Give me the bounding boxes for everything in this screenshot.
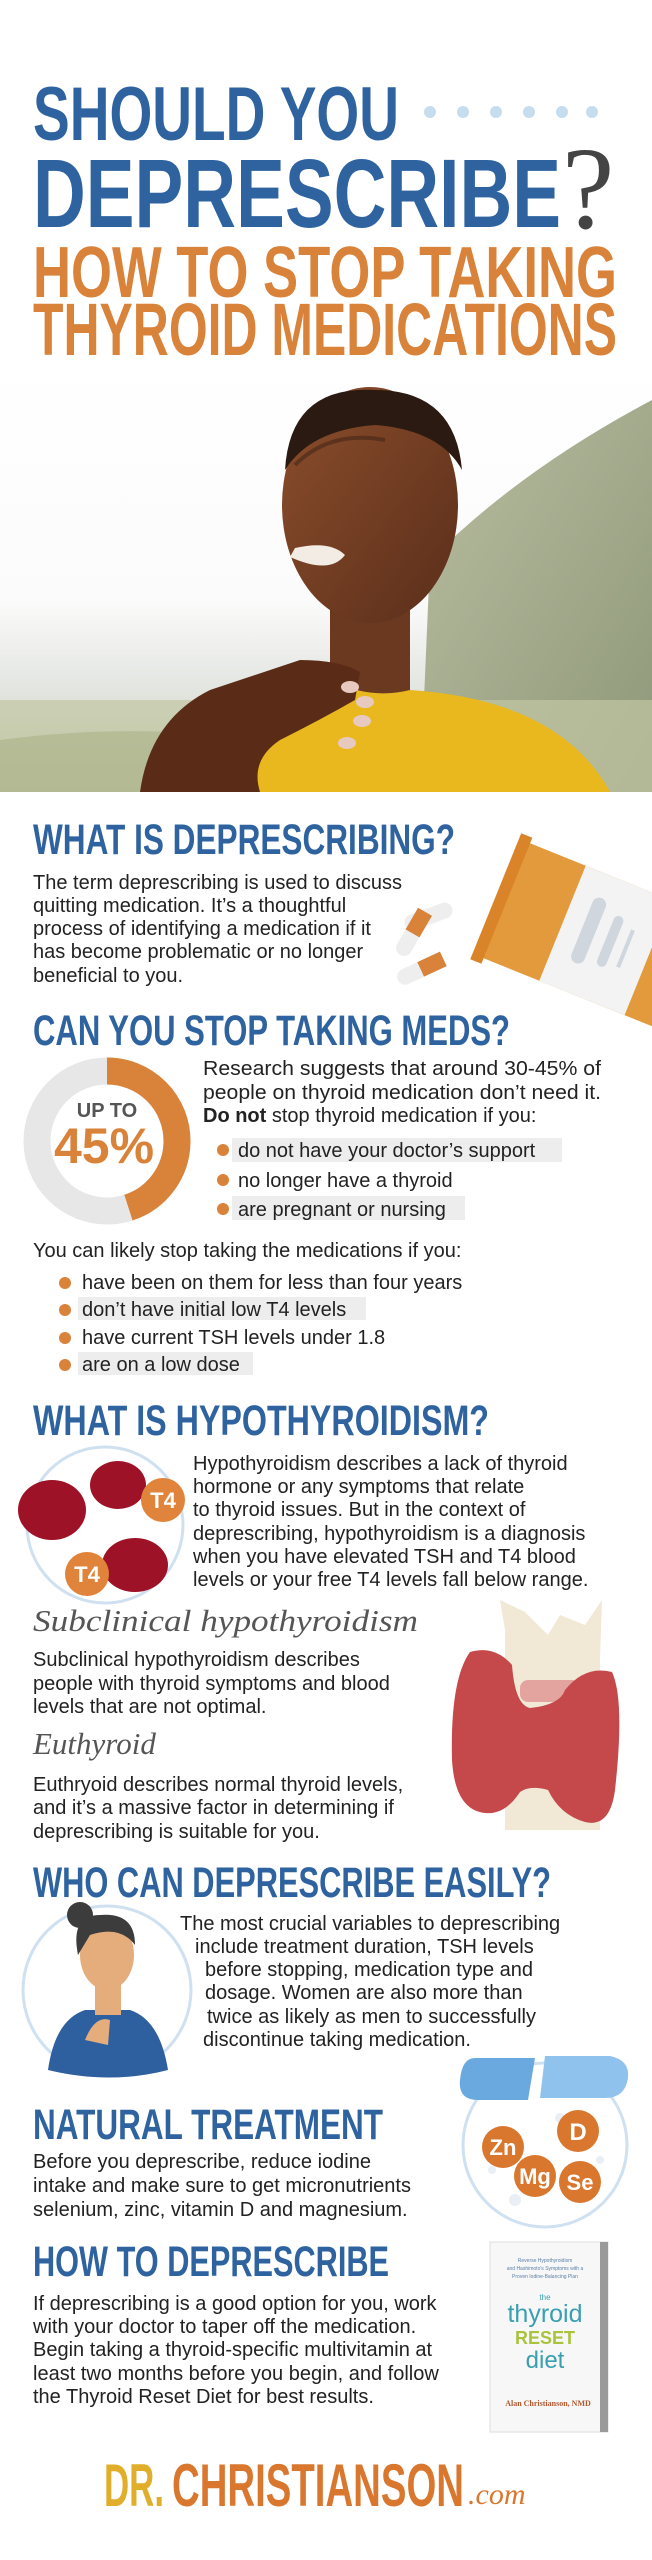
text: euthyroid: Euthryoid describes normal thyroid levels, (33, 1774, 403, 1796)
footer logo: DR. CHRISTIANSON.com: DR. (104, 2452, 164, 2519)
text: how to deprescribe: least two months before you begin, and follow (33, 2363, 439, 2385)
text: how to deprescribe (32, 2293, 439, 2408)
icon: woman (23, 1902, 191, 2078)
text: research (203, 1058, 601, 1127)
list: do not stop if: do not have your doctor’s support (238, 1140, 536, 1162)
icon: capsule and nutrients: Se (567, 2170, 593, 2195)
text: how to deprescribe: If deprescribing is a good option for you, work (33, 2293, 438, 2315)
title: SHOULD YOU (33, 72, 399, 157)
icon: blood cells with T4: T4 (74, 1562, 101, 1587)
icon: thyroid reset diet book: diet (526, 2347, 565, 2374)
icon: thyroid gland (452, 1600, 619, 1830)
text: hypothyroidism definition: to thyroid issues. But in the context of (193, 1499, 526, 1521)
list: you can likely stop if: have current TSH levels under 1.8 (82, 1327, 385, 1349)
icon: thyroid reset diet book: Proven Iodine-Balancing Plan (512, 2274, 578, 2280)
text: deprescribing definition (33, 872, 402, 987)
icon: thyroid reset diet book: Reverse Hypothyroidism (518, 2258, 572, 2264)
icon: thyroid reset diet book: and Hashimoto's Symptoms with a (507, 2266, 583, 2272)
subheading: euthyroid: Euthyroid (32, 1726, 156, 1761)
list: you can likely stop if (33, 1240, 462, 1376)
text: who can deprescribe: twice as likely as men to successfully (207, 2006, 536, 2028)
heading: what is hypothyroidism: WHAT IS HYPOTHYROIDISM? (33, 1397, 489, 1445)
icon: blood cells with T4: T4 (150, 1488, 177, 1513)
text: deprescribing definition: The term deprescribing is used to discuss (33, 872, 402, 894)
text: hypothyroidism definition: deprescribing, hypothyroidism is a diagnosis (193, 1523, 585, 1545)
list: you can likely stop if: have been on them for less than four years (82, 1272, 462, 1294)
text: euthyroid: and it’s a massive factor in determining if (33, 1797, 394, 1819)
list: you can likely stop if: You can likely stop taking the medications if you: (33, 1240, 461, 1262)
title: ? (562, 123, 614, 254)
text: hypothyroidism definition: Hypothyroidism describes a lack of thyroid (193, 1453, 568, 1475)
text: who can deprescribe: before stopping, medication type and (205, 1959, 533, 1981)
icon: thyroid reset diet book (490, 2242, 608, 2432)
photo: woman touching throat (0, 365, 652, 792)
text: who can deprescribe: The most crucial variables to deprescribing (180, 1913, 560, 1935)
icon: capsule and nutrients (460, 2056, 628, 2227)
text: how to deprescribe: with your doctor to taper off the medication. (32, 2316, 416, 2338)
list: you can likely stop if: are on a low dose (82, 1354, 240, 1376)
icon: thyroid reset diet book: the (539, 2293, 551, 2302)
text: research: Do not stop thyroid medication if you: (203, 1105, 536, 1127)
icon: blood cells with T4 (18, 1447, 185, 1603)
text: hypothyroidism definition: hormone or any symptoms that relate (193, 1476, 524, 1498)
text: subclinical: people with thyroid symptoms and blood (33, 1673, 390, 1695)
text: euthyroid (33, 1774, 403, 1843)
donut chart: up to 45% (37, 1071, 177, 1211)
text: natural treatment: selenium, zinc, vitamin D and magnesium. (33, 2199, 408, 2221)
text: subclinical: Subclinical hypothyroidism describes (33, 1649, 360, 1671)
icon: thyroid reset diet book: RESET (515, 2328, 575, 2348)
text: subclinical: levels that are not optimal. (33, 1696, 266, 1718)
icon: capsule and nutrients: Mg (519, 2164, 551, 2189)
text: how to deprescribe: Begin taking a thyroid-specific multivitamin at (33, 2339, 433, 2361)
text: natural treatment: Before you deprescribe, reduce iodine (33, 2151, 371, 2173)
text: deprescribing definition: process of identifying a medication if it (33, 918, 371, 940)
text: research: people on thyroid medication don’t need it. (203, 1082, 601, 1104)
icon: capsule and nutrients: D (569, 2119, 587, 2146)
text: natural treatment (33, 2151, 411, 2221)
footer logo: DR. CHRISTIANSON.com (104, 2452, 525, 2519)
text: deprescribing definition: quitting medication. It’s a thoughtful (33, 895, 346, 917)
text: hypothyroidism definition (192, 1453, 588, 1591)
text: deprescribing definition: has become problematic or no longer (33, 941, 364, 963)
text: deprescribing definition: beneficial to you. (33, 965, 183, 987)
text: hypothyroidism definition: levels or your free T4 levels fall below range. (193, 1569, 588, 1591)
text: who can deprescribe: discontinue taking medication. (203, 2029, 471, 2051)
subheading: subclinical hypothyroidism: Subclinical hypothyroidism (33, 1603, 418, 1638)
heading: what is deprescribing: WHAT IS DEPRESCRIBING? (33, 816, 455, 864)
donut chart: up to 45%: UP TO (77, 1100, 137, 1122)
list: do not stop if: are pregnant or nursing (238, 1199, 446, 1221)
text: how to deprescribe: the Thyroid Reset Diet for best results. (33, 2386, 374, 2408)
heading: natural treatment: NATURAL TREATMENT (33, 2101, 383, 2149)
text: subclinical (33, 1649, 390, 1718)
text: who can deprescribe: dosage. Women are also more than (205, 1982, 523, 2004)
text: who can deprescribe: include treatment duration, TSH levels (195, 1936, 534, 1958)
icon: capsule and nutrients: Zn (490, 2135, 516, 2160)
text: hypothyroidism definition: when you have elevated TSH and T4 blood (192, 1546, 576, 1568)
heading: how to deprescribe: HOW TO DEPRESCRIBE (33, 2238, 389, 2286)
text: euthyroid: deprescribing is suitable for you. (33, 1821, 320, 1843)
text: who can deprescribe (180, 1913, 560, 2051)
list: do not stop if (217, 1138, 562, 1221)
text: natural treatment: intake and make sure to get micronutrients (33, 2175, 411, 2197)
footer logo: DR. CHRISTIANSON.com: .com (468, 2478, 525, 2511)
footer logo: DR. CHRISTIANSON.com: CHRISTIANSON (172, 2452, 464, 2519)
icon: pill bottle with capsules (393, 833, 652, 1060)
icon: thyroid reset diet book: Alan Christianson, NMD (505, 2399, 591, 2408)
icon: thyroid reset diet book: thyroid (507, 2300, 583, 2328)
list: do not stop if: no longer have a thyroid (238, 1170, 453, 1192)
donut chart: up to 45%: 45% (54, 1118, 154, 1174)
text: research: Research suggests that around 30-45% of (203, 1058, 601, 1080)
title (33, 72, 617, 371)
list: you can likely stop if: don’t have initial low T4 levels (82, 1299, 346, 1321)
